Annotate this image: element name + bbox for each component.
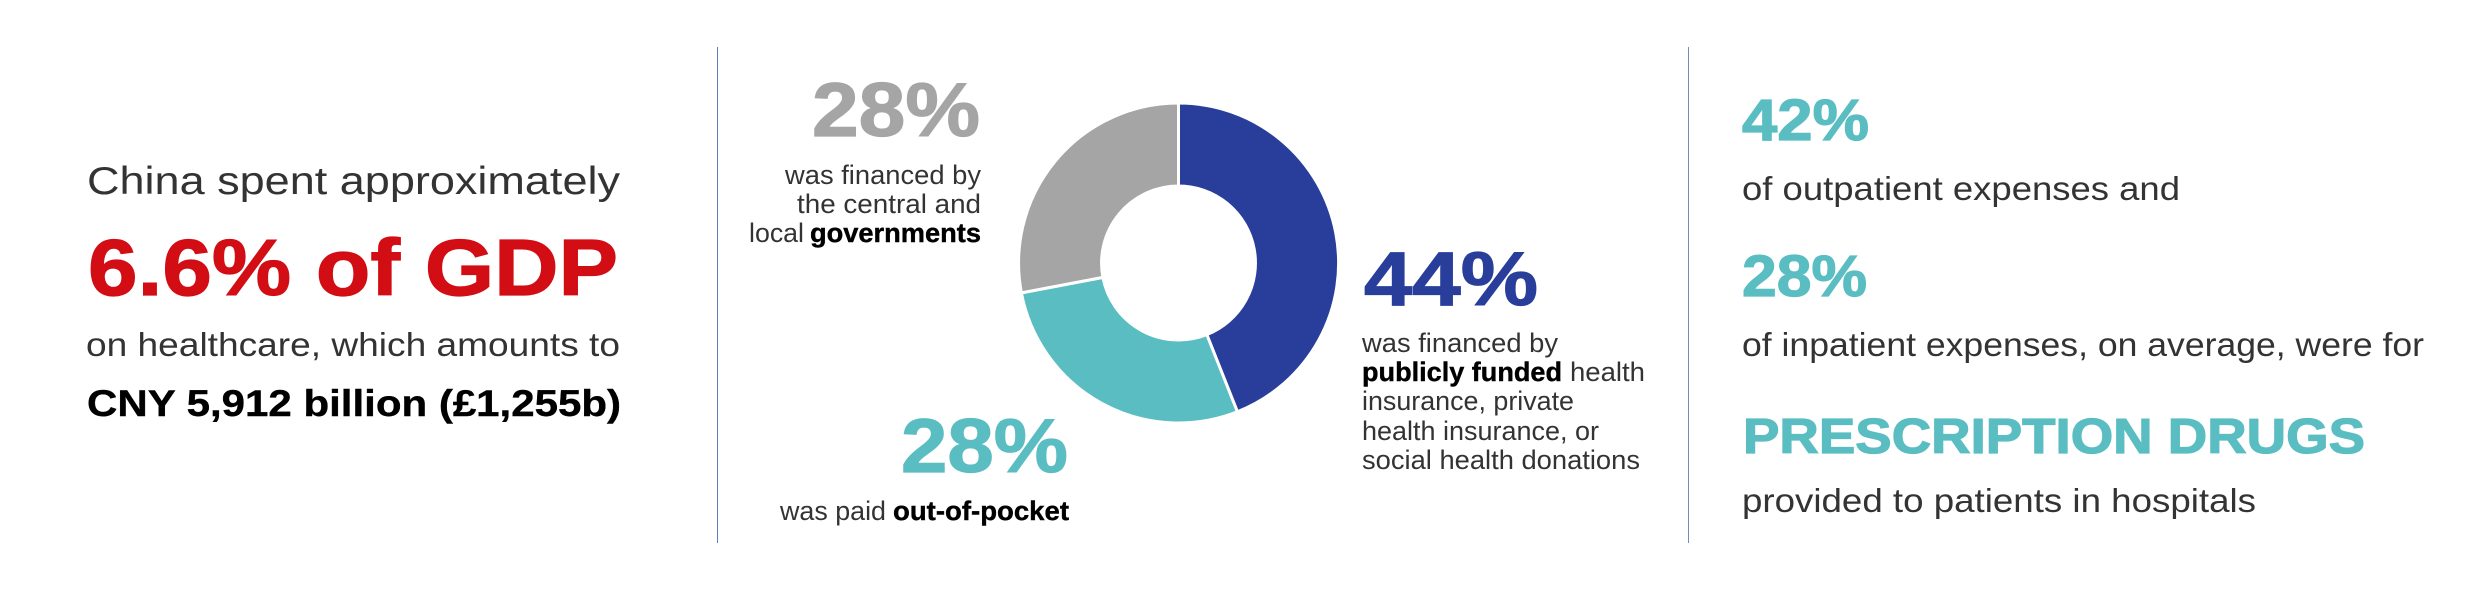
text: financed by central and local governments: local bbox=[749, 218, 804, 248]
number: grey 28%: 28% bbox=[812, 68, 980, 153]
heading: PRESCRIPTION DRUGS: PRESCRIPTION DRUGS bbox=[1743, 410, 2365, 464]
heading: 6.6% of GDP: 6.6% of GDP bbox=[88, 223, 618, 312]
slice: governments 28% bbox=[1019, 103, 1178, 293]
number: 42%: 42% bbox=[1742, 88, 1869, 153]
text: of outpatient expenses and: of outpatient expenses and bbox=[1742, 170, 2180, 207]
text: was paid out-of-pocket: was paid bbox=[779, 496, 886, 526]
label: governments 28% bbox=[749, 68, 981, 248]
slice: out-of-pocket 28% bbox=[1021, 277, 1237, 423]
text: CNY 5,912 billion: CNY 5,912 billion (£1,255b) bbox=[87, 383, 621, 424]
text: financing description: health bbox=[1570, 357, 1645, 387]
number: blue 44%: 44% bbox=[1364, 237, 1538, 322]
text: financing description bbox=[1361, 328, 1645, 475]
label: publicly funded 44% bbox=[1361, 237, 1645, 475]
text: financed by central and local governments: governments bbox=[810, 218, 981, 248]
text: financing description: social health donations bbox=[1362, 445, 1640, 475]
text: was paid out-of-pocket bbox=[779, 496, 1069, 526]
text: China spent approximately: China spent approximately bbox=[87, 160, 621, 203]
text: of inpatient expenses: of inpatient expenses, on average, were for bbox=[1742, 326, 2424, 363]
panel: prescription drugs bbox=[1742, 88, 2424, 519]
text: was paid out-of-pocket: out-of-pocket bbox=[893, 496, 1069, 526]
number: 28%: 28% bbox=[1742, 244, 1867, 309]
text: financing description: publicly funded bbox=[1362, 357, 1562, 387]
number: teal 28%: 28% bbox=[901, 404, 1068, 489]
panel: total healthcare spending bbox=[86, 160, 621, 424]
text: on healthcare, which amounts to: on healthcare, which amounts to bbox=[86, 326, 620, 363]
text: provided to patients in hospitals: provided to patients in hospitals bbox=[1742, 482, 2256, 519]
text: financing description: was financed by bbox=[1361, 328, 1558, 358]
slice: publicly funded 44% bbox=[1178, 103, 1339, 412]
text: financed by central and local governments bbox=[749, 160, 981, 248]
text: financed by central and local governments: the central and bbox=[797, 189, 981, 219]
label: out-of-pocket 28% bbox=[779, 404, 1069, 526]
text: financing description: health insurance, or bbox=[1362, 416, 1599, 446]
text: financing description: insurance, private bbox=[1362, 386, 1574, 416]
text: financed by central and local governments: was financed by bbox=[784, 160, 981, 190]
donut chart bbox=[1019, 103, 1339, 423]
